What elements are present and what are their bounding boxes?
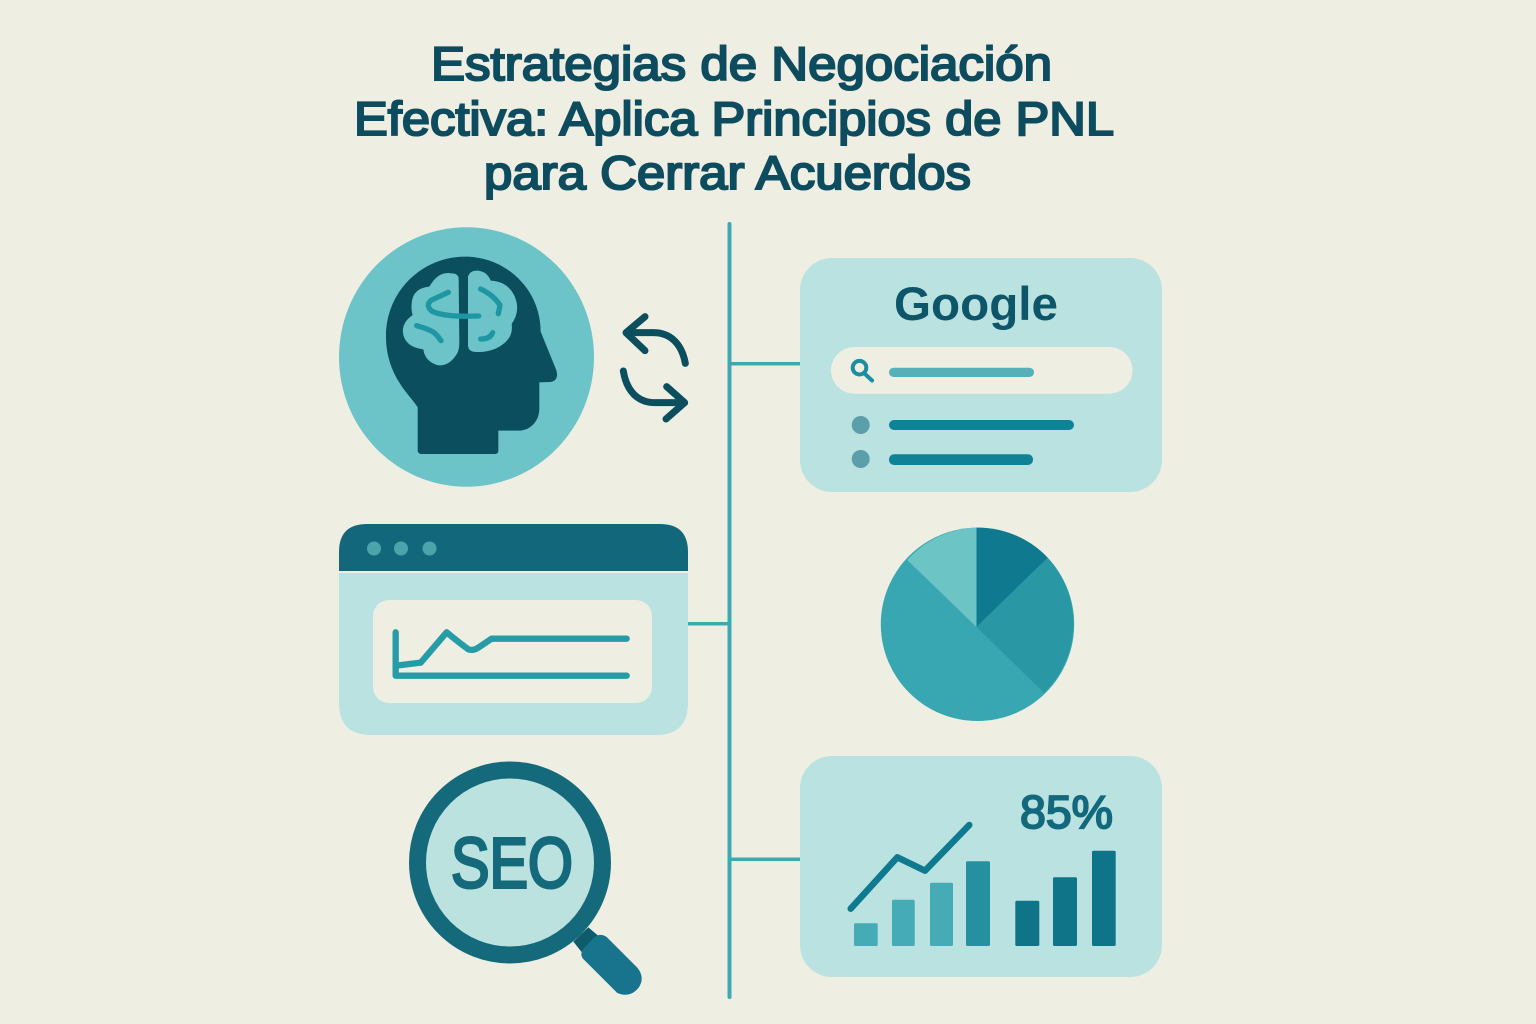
icon: head with brain (339, 227, 594, 487)
title (354, 37, 1114, 199)
pie chart (881, 528, 1074, 721)
trend line (851, 825, 969, 909)
title: Estrategias de Negociación (431, 37, 1052, 90)
bars (854, 851, 1116, 946)
magnifier handle (573, 927, 642, 995)
browser title bar (339, 524, 688, 571)
Google heading: Google (894, 277, 1058, 330)
icon: SEO magnifying glass (418, 770, 642, 995)
panel: Google search (800, 258, 1162, 492)
icon: cycle arrows (623, 317, 685, 419)
search results (852, 416, 1074, 468)
title: para Cerrar Acuerdos (484, 146, 971, 199)
line chart (373, 600, 652, 703)
search bar (831, 347, 1132, 394)
SEO label: SEO (451, 824, 573, 904)
central timeline with connectors (688, 222, 801, 999)
panel: bar chart with 85% (800, 756, 1162, 977)
85% stat: 85% (1020, 786, 1113, 838)
title: Efectiva: Aplica Principios de PNL (354, 92, 1114, 145)
panel: browser window with line chart (339, 524, 688, 735)
